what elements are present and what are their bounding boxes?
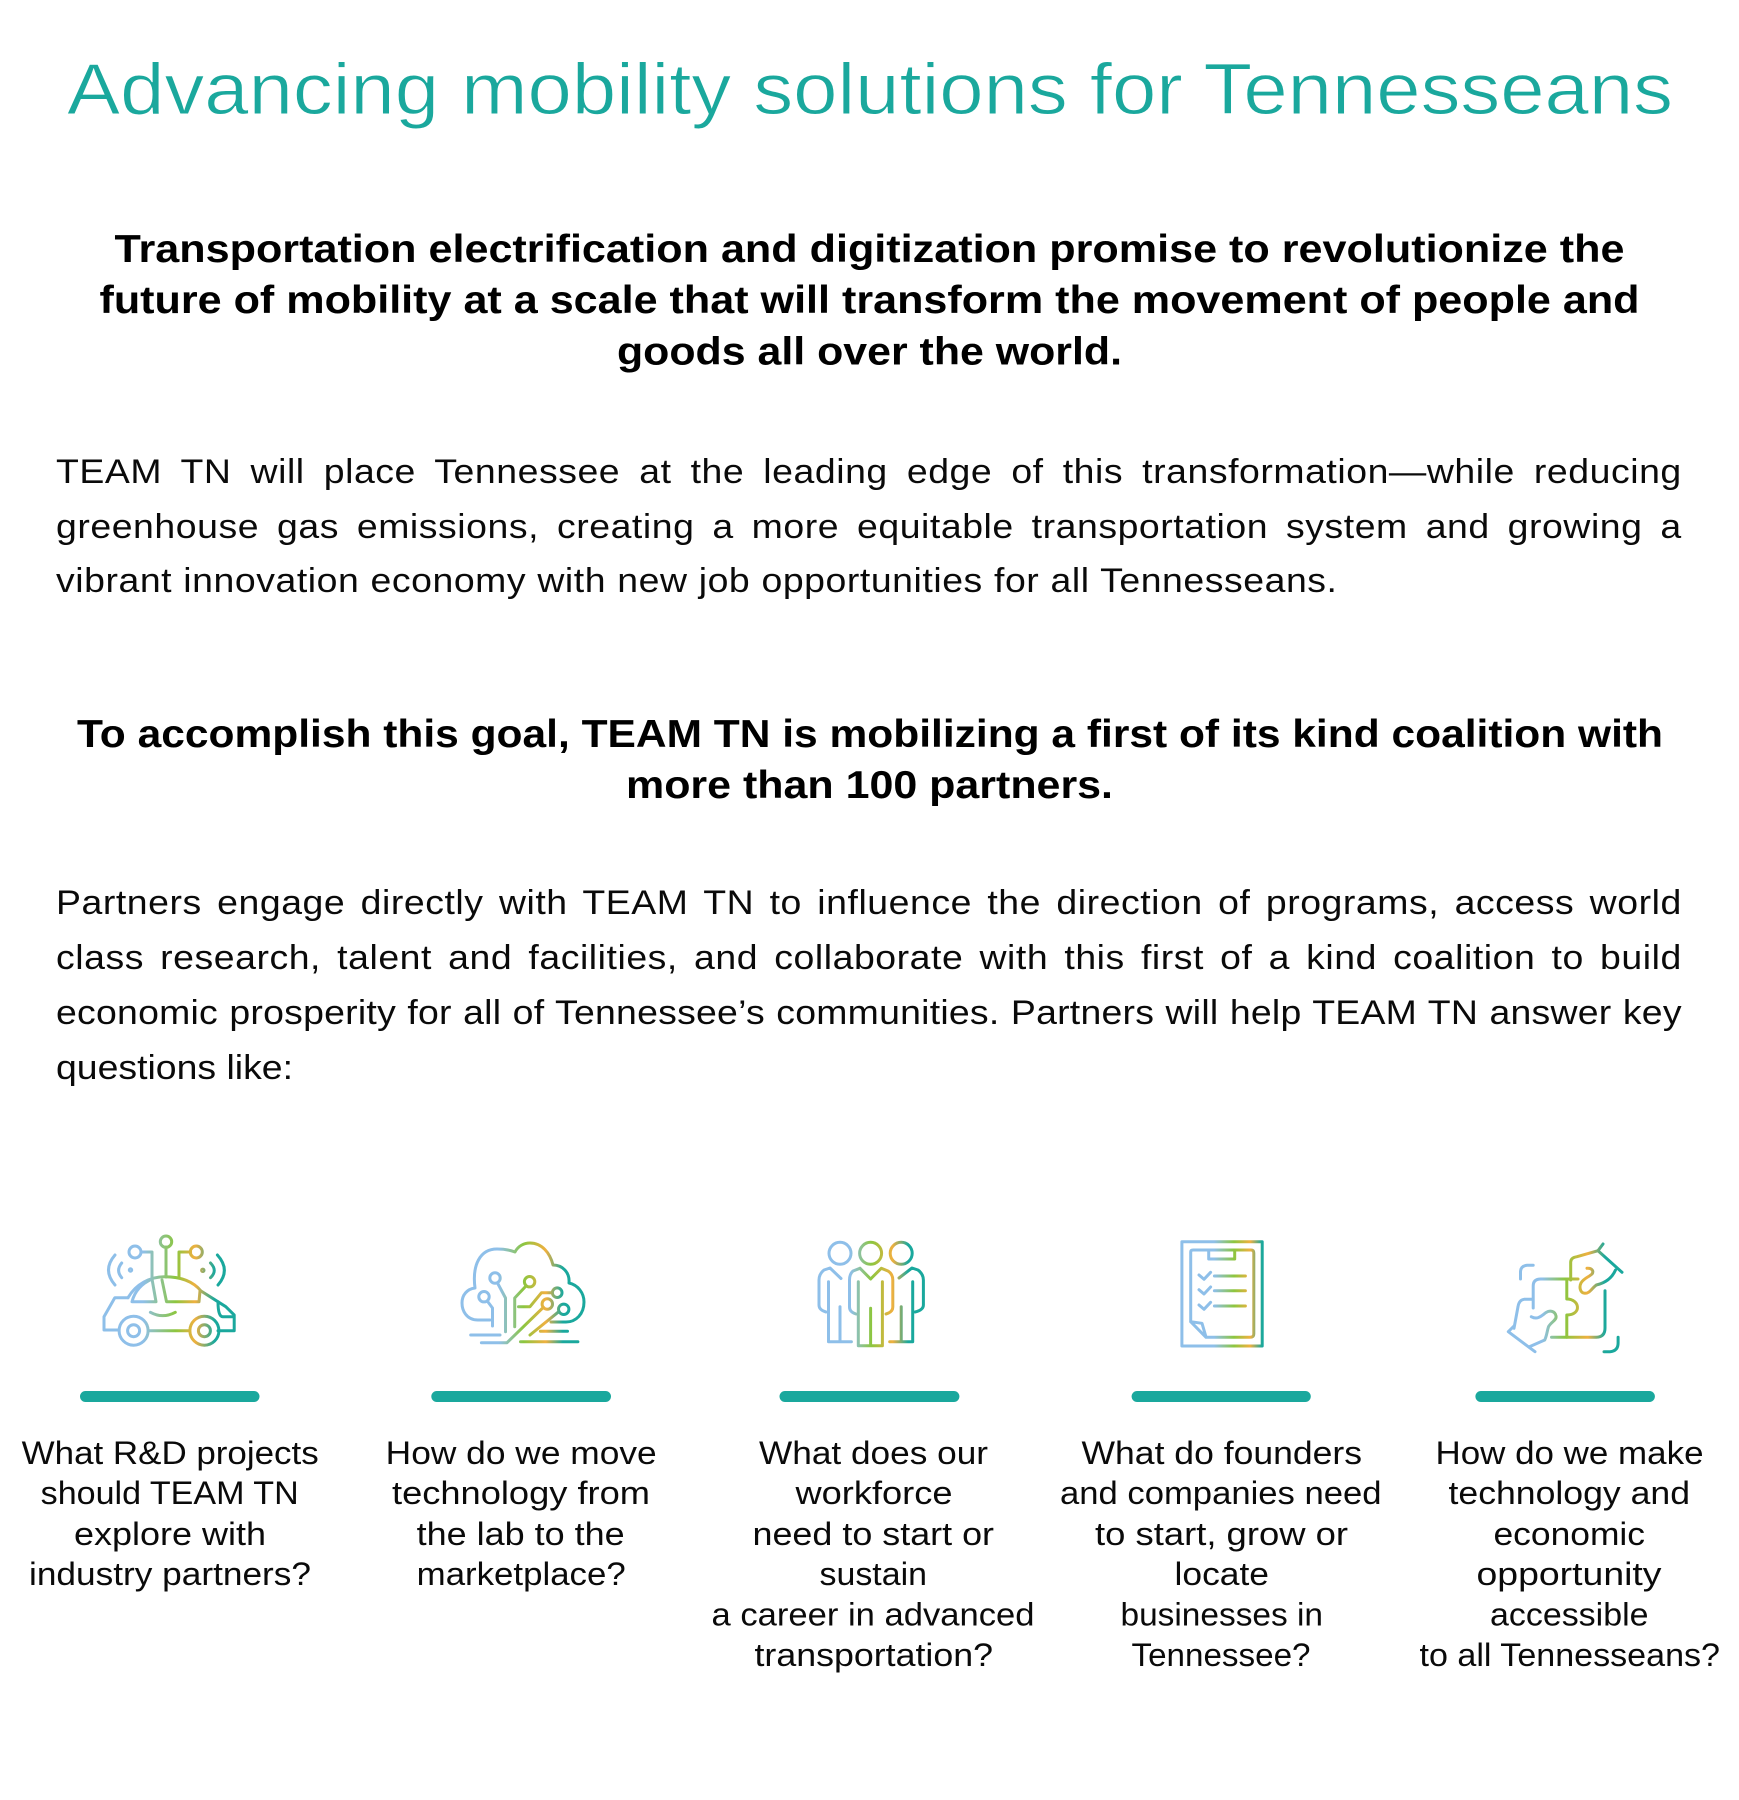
column 1: question: industry partners? [29, 1556, 311, 1592]
column 5: question: to all Tennesseans? [1420, 1637, 1720, 1673]
paragraph: TEAM TN transformation: vibrant innovation economy with new job opportunities for all Tennesseans. [56, 562, 1338, 600]
column 3: question: need to start or [752, 1516, 994, 1552]
heading: transportation electrification: Transportation electrification and digitization promise to revolutionize the [114, 228, 1624, 271]
column 4: question: What do founders [1082, 1435, 1362, 1471]
heading: coalition goal [77, 713, 1663, 807]
column 2: question: How do we move [386, 1435, 657, 1471]
column 3: question [712, 1435, 1034, 1673]
paragraph: TEAM TN transformation: greenhouse gas emissions, creating a more equitable transportation system and growing a [56, 508, 1682, 546]
paragraph: partners engage: economic prosperity for all of Tennessee’s communities. Partners will help TEAM TN answer key [56, 994, 1682, 1032]
column 1: question: should TEAM TN [41, 1475, 299, 1511]
column 4: question [1060, 1435, 1382, 1673]
column 5: question: economic [1494, 1516, 1645, 1552]
column 5: question: technology and [1448, 1475, 1690, 1511]
paragraph: partners engage: Partners engage directly with TEAM TN to influence the direction of programs, access world [56, 884, 1682, 922]
column 5: question: accessible [1490, 1596, 1648, 1632]
column 1: bar [80, 1391, 260, 1402]
heading: transportation electrification: future of mobility at a scale that will transform the movement of people and [100, 279, 1640, 322]
column 3: question: a career in advanced [712, 1596, 1034, 1632]
icon: puzzle hands [1508, 1244, 1622, 1352]
column 5: question [1420, 1435, 1720, 1673]
paragraph: partners engage [56, 884, 1682, 1086]
column 3: question: sustain [820, 1556, 927, 1592]
column 1: question: What R&D projects [22, 1435, 319, 1471]
column 3: question: transportation? [754, 1637, 993, 1673]
column 4: bar [1132, 1391, 1311, 1402]
column 2: question: marketplace? [417, 1556, 626, 1592]
icon: three people [819, 1242, 923, 1346]
column 4: question: businesses in [1120, 1596, 1323, 1632]
column 2: bar [431, 1391, 611, 1402]
column 5: question: opportunity [1476, 1556, 1662, 1592]
paragraph: TEAM TN transformation [56, 453, 1682, 600]
column 2: question [386, 1435, 657, 1592]
column 1: question [22, 1435, 319, 1592]
heading: transportation electrification [100, 228, 1640, 373]
title: Advancing mobility solutions for Tennesseans [67, 50, 1673, 130]
icon: connected car [104, 1236, 234, 1345]
paragraph: partners engage: questions like: [56, 1048, 293, 1086]
column 4: question: to start, grow or [1095, 1516, 1348, 1552]
column 4: question: locate [1174, 1556, 1269, 1592]
column 5: question: How do we make [1436, 1435, 1704, 1471]
heading: transportation electrification: goods all over the world. [617, 330, 1122, 373]
paragraph: partners engage: class research, talent and facilities, and collaborate with this first of a kind coalition to build [56, 938, 1682, 976]
heading: coalition goal: To accomplish this goal, TEAM TN is mobilizing a first of its kind coalition with [77, 713, 1663, 756]
heading: coalition goal: more than 100 partners. [626, 764, 1113, 807]
column 2: question: the lab to the [417, 1516, 625, 1552]
column 4: question: and companies need [1060, 1475, 1382, 1511]
column 2: question: technology from [392, 1475, 650, 1511]
column 3: bar [780, 1391, 959, 1402]
icon: clipboard checklist [1182, 1242, 1262, 1346]
column 5: bar [1475, 1391, 1655, 1402]
column 4: question: Tennessee? [1132, 1637, 1310, 1673]
column 3: question: workforce [794, 1475, 952, 1511]
paragraph: TEAM TN transformation: TEAM TN will place Tennessee at the leading edge of this transformation—while reducing [56, 453, 1682, 491]
column 1: question: explore with [74, 1516, 266, 1552]
icon: cloud circuit [462, 1243, 584, 1343]
column 3: question: What does our [759, 1435, 988, 1471]
